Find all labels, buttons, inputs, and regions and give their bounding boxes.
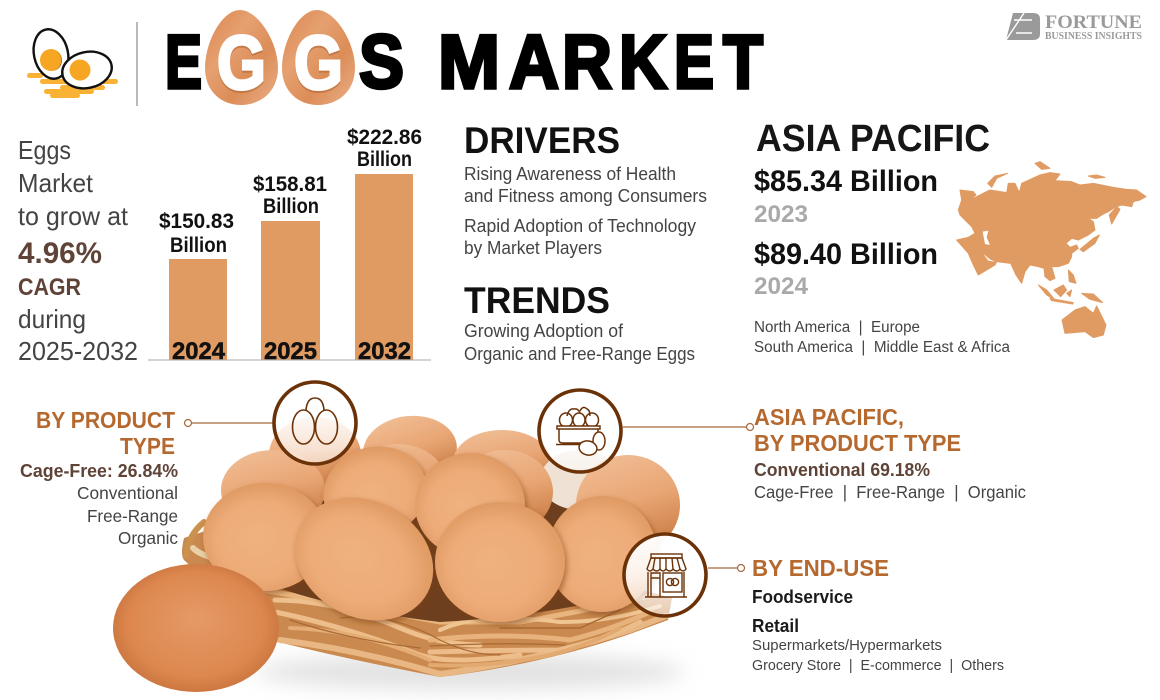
back eggs bbox=[221, 411, 680, 555]
icon: three eggs bbox=[274, 382, 356, 464]
icon: retail store bbox=[624, 534, 706, 616]
bar chart: market size bbox=[148, 126, 431, 365]
text block: trends: Organic and Free-Range Eggs bbox=[464, 344, 695, 364]
bar chart: market size: Billion bbox=[357, 148, 412, 171]
title: EGGS MARKET: G bbox=[294, 23, 343, 108]
bar chart: market size: 2032 bbox=[358, 338, 411, 365]
text block: trends: Growing Adoption of bbox=[464, 321, 624, 341]
front single egg bbox=[113, 564, 279, 692]
middle eggs bbox=[203, 435, 657, 612]
title: EGGS MARKET: M bbox=[438, 20, 500, 105]
text block: drivers: Rapid Adoption of Technology bbox=[464, 216, 696, 236]
bar chart: market size: $150.83 bbox=[159, 210, 234, 233]
panel: Asia Pacific figures: 2024 bbox=[754, 273, 809, 300]
text block: CAGR statement bbox=[18, 135, 138, 366]
photo: basket of brown eggs bbox=[113, 411, 685, 692]
panel: Asia Pacific figures bbox=[754, 118, 1010, 356]
text block: CAGR statement: 4.96% bbox=[18, 237, 102, 270]
text block: trends: TRENDS bbox=[464, 280, 610, 321]
icon: basket of eggs bbox=[539, 390, 621, 472]
brand logo: Fortune Business Insights bbox=[1006, 12, 1142, 42]
callout: by product type: BY PRODUCT bbox=[36, 407, 175, 433]
callout: by product type: Organic bbox=[118, 528, 178, 548]
title: EGGS MARKET: R bbox=[562, 20, 612, 105]
front eggs bbox=[273, 474, 565, 644]
basket shadow bbox=[255, 654, 685, 690]
text block: CAGR statement: during bbox=[18, 304, 86, 334]
text block: drivers: Rising Awareness of Health bbox=[464, 164, 676, 184]
text block: drivers: DRIVERS bbox=[464, 120, 620, 161]
bar chart: market size: 2024 bbox=[172, 338, 226, 365]
callout: by end-use: Supermarkets/Hypermarkets bbox=[752, 637, 942, 654]
callout: by product type: Free-Range bbox=[87, 506, 178, 526]
callout: Asia Pacific by product type: ASIA PACIFIC, bbox=[754, 404, 904, 430]
panel: Asia Pacific figures: North America | Europe bbox=[754, 319, 920, 336]
text block: drivers bbox=[464, 120, 707, 258]
callout: Asia Pacific by product type: Conventional 69.18% bbox=[754, 460, 930, 480]
bar chart: market size: $158.81 bbox=[253, 173, 327, 196]
title: EGGS MARKET: G bbox=[217, 21, 266, 106]
text block: CAGR statement: Eggs bbox=[18, 135, 71, 165]
title: EGGS MARKET: K bbox=[619, 20, 667, 105]
callout: by product type bbox=[20, 407, 274, 548]
text block: trends bbox=[464, 280, 695, 364]
logo icon: boiled eggs bbox=[27, 26, 118, 98]
callout: by end-use: Grocery Store | E-commerce | Others bbox=[752, 657, 1004, 674]
bar chart: market size: Billion bbox=[263, 195, 319, 218]
panel: Asia Pacific figures: $89.40 Billion bbox=[754, 238, 938, 271]
wicker basket bbox=[182, 500, 672, 677]
brand logo: Fortune Business Insights: BUSINESS INSIGHTS bbox=[1045, 31, 1142, 42]
callout: Asia Pacific by product type: BY PRODUCT TYPE bbox=[754, 430, 961, 456]
bar chart: market size: Billion bbox=[170, 234, 227, 257]
callout: by end-use: BY END-USE bbox=[752, 555, 889, 581]
text block: CAGR statement: Market bbox=[18, 168, 94, 198]
title: EGGS MARKET: E bbox=[165, 20, 202, 105]
text block: CAGR statement: CAGR bbox=[18, 274, 81, 301]
brand logo: Fortune Business Insights: FORTUNE bbox=[1045, 12, 1142, 33]
text block: CAGR statement: to grow at bbox=[18, 201, 129, 231]
title: EGGS MARKET: G bbox=[217, 23, 266, 108]
text block: drivers: by Market Players bbox=[464, 238, 602, 258]
callout: Asia Pacific by product type bbox=[622, 404, 1026, 502]
title: EGGS MARKET bbox=[165, 10, 763, 108]
bar chart: market size: 2025 bbox=[264, 338, 317, 365]
title: EGGS MARKET: A bbox=[509, 20, 559, 105]
panel: Asia Pacific figures: $85.34 Billion bbox=[754, 165, 938, 198]
callout: Asia Pacific by product type: Cage-Free | Free-Range | Organic bbox=[754, 482, 1026, 502]
text block: CAGR statement: 2025-2032 bbox=[18, 336, 138, 366]
text block: drivers: and Fitness among Consumers bbox=[464, 186, 707, 206]
callout: by end-use: Foodservice bbox=[752, 587, 853, 607]
basket interior shadow bbox=[270, 500, 640, 622]
title: EGGS MARKET: S bbox=[359, 20, 404, 105]
title: EGGS MARKET: G bbox=[294, 21, 343, 106]
panel: Asia Pacific figures: ASIA PACIFIC bbox=[756, 118, 990, 160]
callout: by end-use bbox=[708, 555, 1004, 674]
title: EGGS MARKET: E bbox=[674, 20, 714, 105]
callout: by end-use: Retail bbox=[752, 616, 799, 636]
title: EGGS MARKET: T bbox=[723, 20, 763, 105]
callout: by product type: Cage-Free: 26.84% bbox=[20, 461, 178, 481]
panel: Asia Pacific figures: South America | Middle East & Africa bbox=[754, 339, 1010, 356]
map: Asia Pacific bbox=[957, 162, 1146, 338]
callout: by product type: Conventional bbox=[77, 483, 178, 503]
bar chart: market size: $222.86 bbox=[347, 126, 422, 149]
panel: Asia Pacific figures: 2023 bbox=[754, 201, 808, 228]
header divider bbox=[136, 22, 138, 106]
callout: by product type: TYPE bbox=[120, 433, 175, 459]
